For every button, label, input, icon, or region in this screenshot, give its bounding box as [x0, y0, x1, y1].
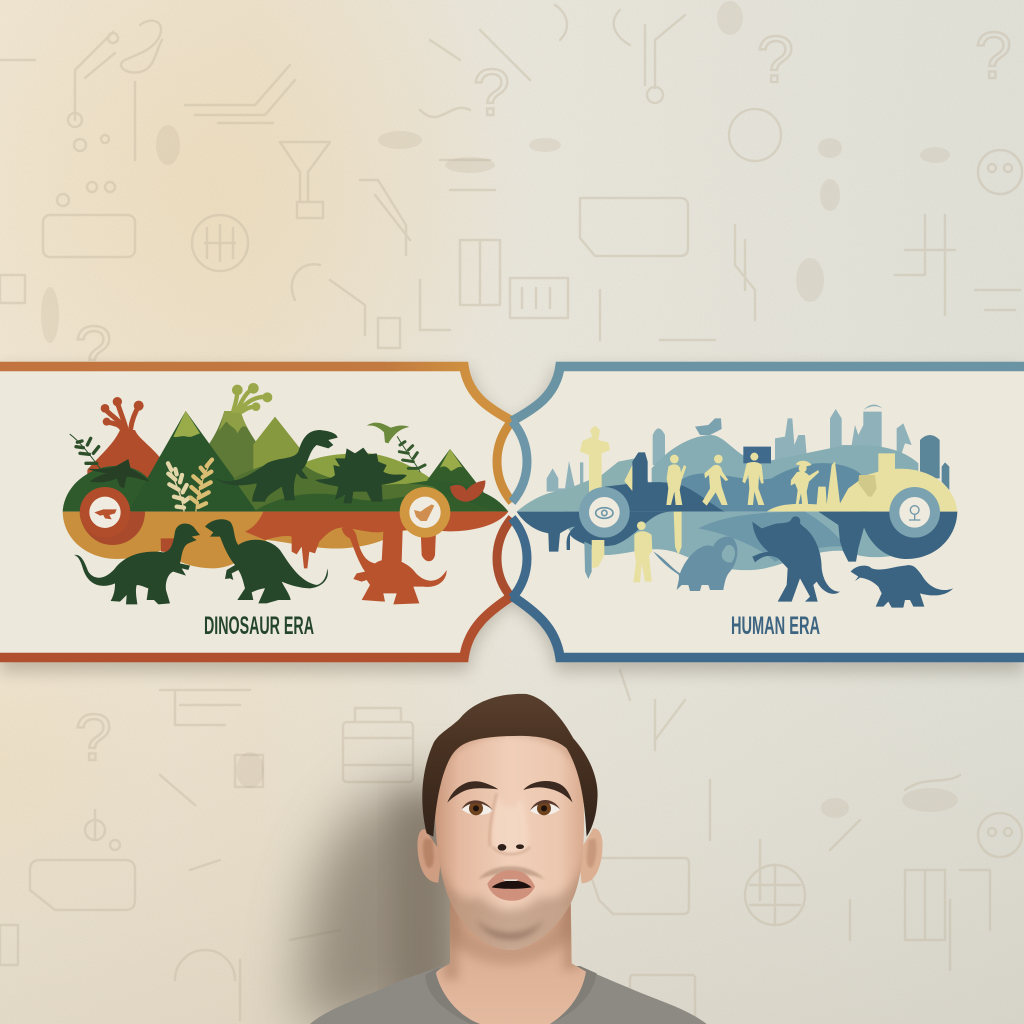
fern: pale left	[167, 462, 189, 511]
red volcano	[87, 397, 161, 482]
woven strand, red	[497, 518, 512, 598]
small yellow triangle	[624, 465, 632, 491]
faint question marks on the wall: ?	[75, 700, 112, 774]
long-necked blue dinosaur	[653, 537, 737, 591]
right eyebrow	[523, 781, 573, 803]
human 4 with hat	[791, 461, 819, 506]
woven strand, orange	[497, 421, 512, 502]
orange ground	[63, 512, 508, 568]
face	[435, 730, 584, 950]
human 3	[742, 453, 764, 505]
panel frame	[0, 366, 512, 658]
panel frame	[512, 366, 1024, 658]
lower land, teal	[563, 512, 905, 570]
shadow of the man on the wall	[300, 780, 470, 1024]
observatory	[695, 418, 722, 435]
green land body	[63, 466, 508, 512]
shirt	[310, 966, 707, 1024]
collar	[425, 966, 597, 1024]
left eyebrow	[447, 781, 498, 803]
olive peak	[253, 417, 300, 488]
human 1	[666, 455, 686, 505]
right badge	[889, 487, 940, 538]
yellow tower	[580, 426, 610, 512]
dark red arc under left badge	[80, 512, 145, 545]
neck	[436, 901, 586, 1024]
right eye	[530, 800, 560, 815]
faint question marks on the wall: ?	[473, 55, 510, 129]
mouth	[487, 870, 535, 901]
label: dinosaur era: DINOSAUR ERA	[204, 612, 314, 640]
left eye	[462, 800, 493, 815]
panel base shared by both eras	[0, 366, 1024, 658]
label: human era: HUMAN ERA	[731, 612, 820, 640]
humans row	[633, 453, 819, 582]
distant skyline	[547, 405, 912, 492]
left land	[517, 458, 648, 512]
soft smudges in the wall pattern	[41, 1, 958, 818]
fern: top left branch	[70, 434, 100, 468]
mid teal wave	[678, 463, 882, 512]
panel: human era	[512, 366, 1024, 658]
olive volcano	[206, 383, 272, 512]
upright navy beast	[752, 516, 840, 602]
red ground and drips	[245, 512, 508, 568]
far right peak	[427, 449, 483, 512]
vehicle sketch on yellow	[858, 475, 877, 497]
dark right towers	[920, 435, 949, 490]
lower middle dinosaur	[205, 519, 328, 603]
panel drop shadow	[0, 368, 1024, 672]
warehouse shape	[743, 447, 771, 463]
lower right navy dinosaur	[851, 565, 953, 608]
lower navy band	[517, 512, 672, 552]
faint question marks on the wall: ?	[975, 18, 1012, 92]
illustration: modern city landscape	[517, 405, 957, 608]
rounded hill with observatory	[652, 435, 918, 512]
faint question marks on the wall: ?	[757, 22, 794, 96]
icon: gear ring	[596, 508, 613, 518]
dark navy block	[632, 452, 648, 485]
faint question marks on the wall: ?	[75, 312, 112, 386]
lower left dinosaur	[74, 524, 200, 604]
icon: winged creature	[414, 504, 434, 521]
illustration: prehistoric landscape	[63, 383, 508, 604]
lower right red dinosaur	[342, 527, 447, 604]
faint question marks on the wall	[75, 18, 1012, 774]
yellow ground with building and arc	[767, 453, 957, 512]
icon: small dinosaur	[94, 509, 117, 519]
right bushy leaves	[450, 480, 485, 502]
left badge	[579, 487, 630, 538]
right badge	[400, 487, 450, 538]
human 2	[702, 455, 728, 506]
lower teal spire	[584, 542, 592, 579]
stubble and beard shading	[434, 733, 587, 957]
navy land	[605, 482, 725, 512]
panel: dinosaur era	[0, 366, 512, 658]
olive hill	[293, 453, 432, 512]
left ear	[417, 829, 442, 883]
pterosaur	[367, 423, 409, 443]
left badge	[80, 487, 130, 538]
small dinosaur on hill	[87, 459, 150, 488]
woven strand, navy	[512, 518, 527, 598]
right ear	[578, 828, 603, 883]
icon: machine	[909, 506, 920, 520]
hair	[422, 694, 598, 837]
lower human	[633, 521, 652, 582]
fern: pale right	[191, 458, 213, 511]
reflected yellow tower	[592, 540, 604, 568]
woven strand, teal	[512, 421, 527, 502]
large mountain	[128, 411, 258, 512]
large upright dinosaur	[215, 430, 338, 502]
nose	[490, 793, 530, 855]
fern: top right branch	[397, 437, 425, 472]
lower dark mid wave	[698, 512, 845, 562]
surprised man	[310, 694, 707, 1024]
layered hills	[233, 462, 467, 512]
stegosaurus	[315, 448, 407, 503]
lower navy arc	[860, 512, 957, 559]
